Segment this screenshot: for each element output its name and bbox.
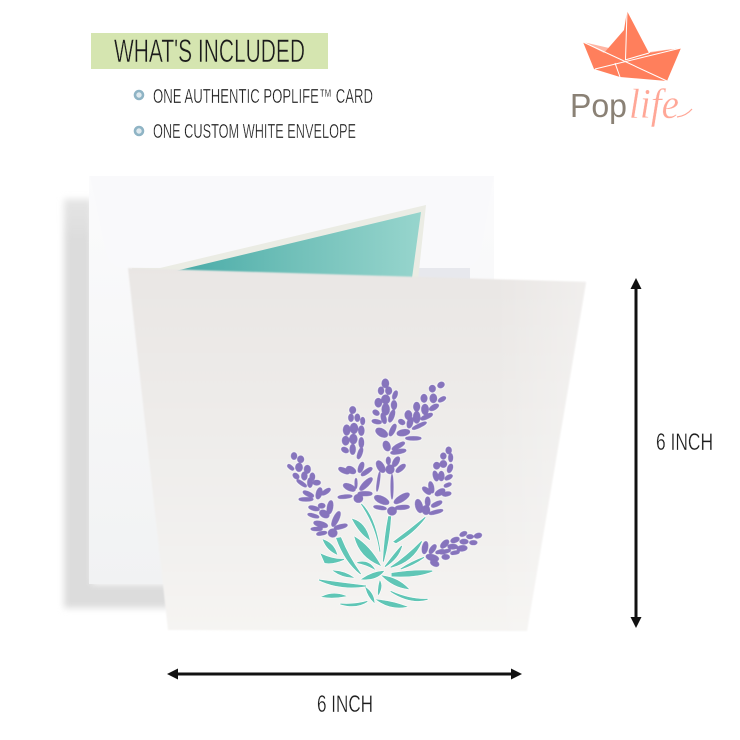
logo: poplife paper boat: Pop bbox=[570, 87, 627, 124]
leaves and stems bbox=[319, 504, 432, 607]
list: included items bbox=[135, 86, 373, 143]
illustration: lavender bouquet bbox=[287, 379, 482, 607]
top centre spike bbox=[382, 379, 388, 387]
card: front cover bbox=[128, 268, 586, 631]
label: height 6 inch: 6 INCH bbox=[656, 429, 713, 456]
arrow: horizontal dimension bbox=[167, 668, 522, 680]
lavender blossoms bbox=[287, 379, 482, 567]
logo: poplife paper boat: life bbox=[629, 82, 679, 128]
logo: poplife paper boat bbox=[570, 11, 692, 128]
arrow: vertical dimension bbox=[630, 278, 642, 628]
heading: what's included: WHAT'S INCLUDED bbox=[114, 33, 305, 69]
upper right spike bbox=[437, 381, 445, 389]
label: width 6 inch: 6 INCH bbox=[317, 691, 373, 718]
heading: what's included bbox=[91, 33, 328, 69]
list: included items: ONE CUSTOM WHITE ENVELOPE bbox=[153, 121, 356, 143]
envelope with shadow bbox=[64, 176, 494, 608]
inner card with teal interior bbox=[132, 205, 426, 280]
left spike bbox=[350, 407, 355, 413]
lower right spike bbox=[474, 533, 482, 538]
centre flower heads bbox=[375, 460, 386, 473]
far left spike bbox=[292, 453, 296, 459]
list: included items: ONE AUTHENTIC POPLIFE™ CARD bbox=[153, 86, 373, 108]
right spike bbox=[446, 447, 451, 453]
